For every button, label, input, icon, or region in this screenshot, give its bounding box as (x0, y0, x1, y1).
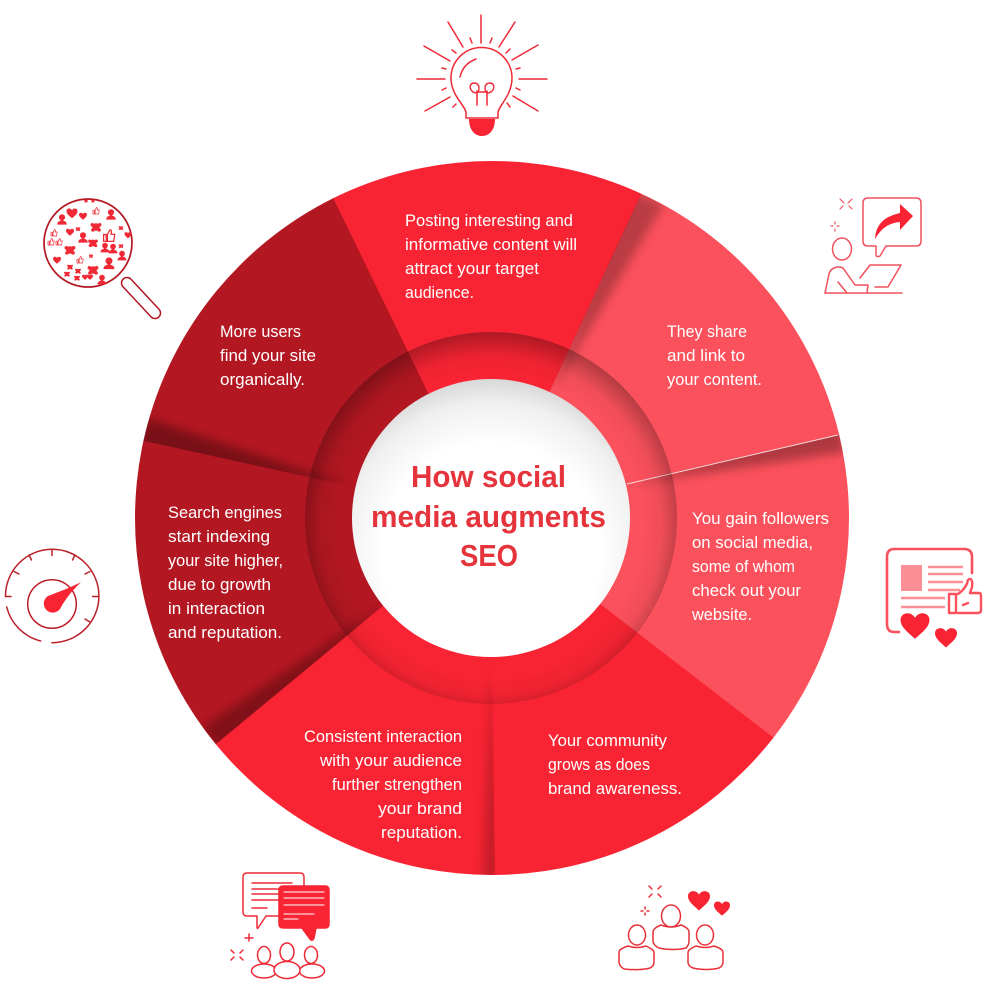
text: left segment (168, 504, 283, 642)
text: left segment: start indexing (168, 528, 270, 546)
text: top segment: audience. (405, 284, 474, 302)
title: How social (411, 459, 566, 494)
hearts (900, 613, 957, 647)
hearts, people, puzzle pieces and thumbs (48, 200, 132, 284)
text: upper right segment (667, 323, 762, 389)
text: bottom left segment: reputation. (381, 824, 462, 842)
text: bottom left segment: further strengthen (332, 776, 462, 794)
text: left segment: your site higher, (168, 552, 283, 570)
text: bottom left segment (304, 728, 462, 842)
segment: left (135, 440, 384, 744)
segment: top (333, 161, 642, 394)
segment: upper right (550, 194, 840, 484)
text: lower right segment: on social media, (692, 534, 813, 552)
text: upper right segment: They share (667, 323, 747, 341)
text: lower right segment: You gain followers (692, 510, 829, 528)
text: bottom left segment: Consistent interaction (304, 728, 462, 746)
icon: share speech bubble (825, 198, 921, 293)
inner ring shadow (305, 332, 677, 704)
text: lower right segment: check out your (692, 582, 802, 600)
text: bottom left segment: your brand (378, 800, 462, 818)
text: upper right segment: your content. (667, 371, 762, 389)
text: upper right segment: and link to (667, 347, 745, 365)
text: upper left segment: More users (220, 323, 301, 341)
icon: community with hearts (619, 886, 730, 970)
text: bottom right segment: brand awareness. (548, 780, 682, 798)
title (371, 459, 606, 573)
text: upper left segment: find your site (220, 347, 316, 365)
center circle (352, 379, 630, 657)
text: upper left segment: organically. (220, 371, 305, 389)
title: SEO (460, 538, 518, 573)
segment: upper left (143, 198, 429, 488)
text: bottom right segment: Your community (548, 732, 668, 750)
icon: speedometer gauge (5, 549, 99, 643)
text: bottom right segment (548, 732, 682, 798)
white seam (627, 435, 838, 484)
segment shadows (136, 190, 846, 880)
text: left segment: and reputation. (168, 624, 282, 642)
text: upper left segment (220, 323, 316, 389)
text: left segment: due to growth (168, 576, 271, 594)
text: top segment: attract your target (405, 260, 539, 278)
magnifying glass handle (127, 283, 155, 313)
segment: bottom left (216, 606, 495, 875)
icon: chat bubbles and group (231, 873, 329, 978)
text: lower right segment (691, 510, 829, 624)
text: bottom right segment: grows as does (548, 756, 650, 774)
icon: light bulb (417, 15, 547, 136)
icon: thumbs up (949, 579, 981, 613)
title: media augments (371, 499, 606, 534)
segment: bottom right (492, 604, 774, 875)
icon: magnifying glass (44, 199, 155, 313)
icon: post with likes and hearts (887, 549, 981, 647)
post thumbnail and text lines (901, 565, 963, 607)
text: lower right segment: some of whom (692, 558, 795, 576)
text: top segment: Posting interesting and (405, 212, 573, 230)
segment: lower right (600, 434, 849, 738)
text: lower right segment: website. (691, 606, 752, 624)
text: left segment: in interaction (168, 600, 265, 618)
donut chart (135, 161, 849, 875)
text: left segment: Search engines (168, 504, 282, 522)
text: top segment (405, 212, 577, 302)
text: top segment: informative content will (405, 236, 577, 254)
text: bottom left segment: with your audience (319, 752, 462, 770)
